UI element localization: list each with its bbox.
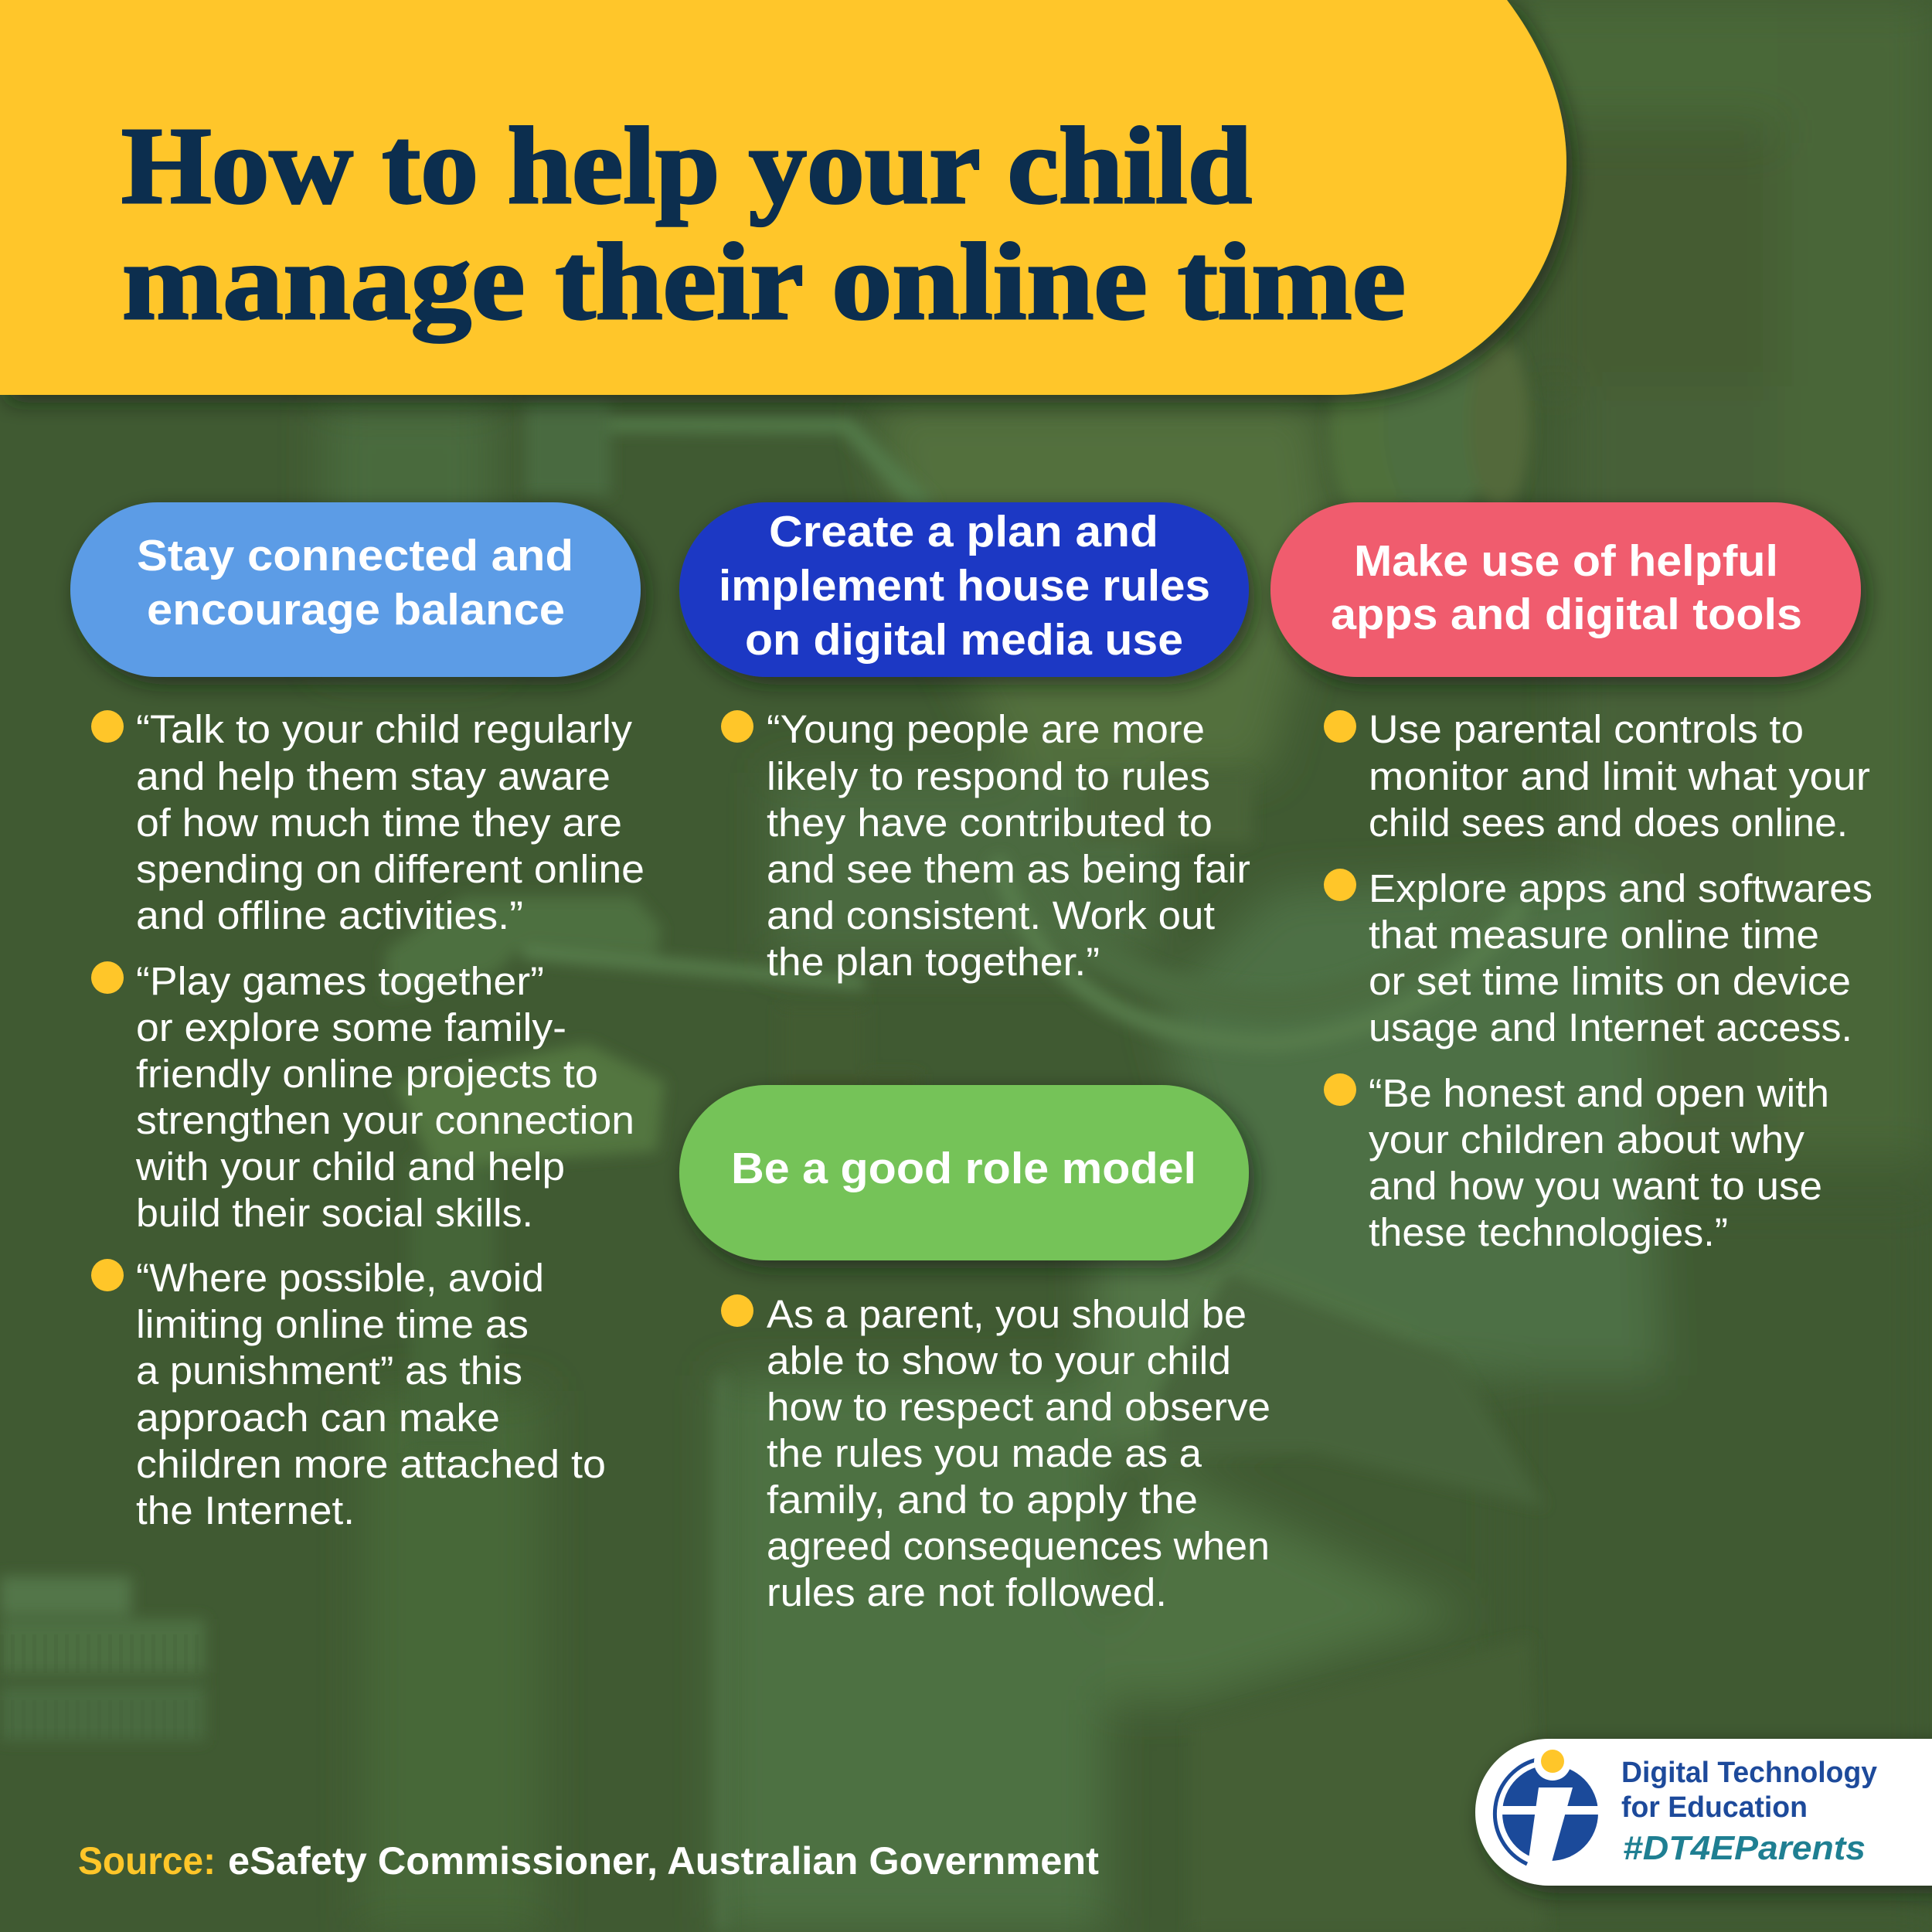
panel: role model: [679, 1085, 1270, 1614]
pill heading: role model: [679, 1085, 1249, 1260]
tip: young people: they have contributed to: [767, 801, 1213, 845]
tip: be honest: your children about why: [1369, 1117, 1805, 1162]
tip: play games together: or explore some family-: [136, 1005, 566, 1049]
source line: Source:: [78, 1839, 216, 1883]
pill heading: stay connected: [70, 502, 641, 677]
tip: as a parent: As a parent, you should be: [767, 1292, 1247, 1336]
tip: parental controls: monitor and limit what your: [1369, 754, 1870, 798]
tip: young people: the plan together.”: [767, 940, 1100, 984]
pill heading: helpful apps: Make use of helpful: [1354, 536, 1778, 586]
tip: play games together: strengthen your connection: [136, 1098, 634, 1142]
pill heading: helpful apps: apps and digital tools: [1331, 590, 1802, 639]
header banner: [0, 0, 1566, 395]
tip: as a parent: rules are not followed.: [767, 1570, 1167, 1614]
tip: as a parent: agreed consequences when: [767, 1524, 1270, 1568]
tip: parental controls: child sees and does online.: [1369, 801, 1848, 845]
tip: parental controls: [1324, 707, 1870, 845]
tip: talk to your child: and help them stay aware: [136, 754, 611, 798]
tip: talk to your child: spending on different online: [136, 847, 645, 891]
tip: as a parent: family, and to apply the: [767, 1478, 1198, 1522]
tip: as a parent: [721, 1292, 1270, 1614]
pill heading: stay connected: Stay connected and: [137, 531, 573, 580]
tip: young people: likely to respond to rules: [767, 754, 1210, 798]
tip: talk to your child: “Talk to your child regularly: [136, 707, 633, 751]
tip: explore apps: or set time limits on device: [1369, 959, 1851, 1003]
tip: explore apps: [1324, 866, 1872, 1049]
pill heading: role model: Be a good role model: [731, 1144, 1196, 1193]
title: How to help your child: [121, 104, 1252, 226]
tip: avoid limiting online time: [91, 1256, 606, 1532]
title: manage their online time: [122, 220, 1406, 342]
source line: eSafety Commissioner, Australian Government: [228, 1839, 1099, 1883]
title: [121, 104, 1406, 342]
logo text: #DT4EParents: [1623, 1829, 1866, 1867]
logo text: for Education: [1621, 1791, 1808, 1824]
logo text: [1621, 1757, 1877, 1867]
tip: be honest: [1324, 1071, 1829, 1254]
tip: explore apps: Explore apps and softwares: [1369, 866, 1872, 910]
tip: avoid limiting online time: limiting online time as: [136, 1302, 529, 1346]
tip: talk to your child: of how much time they are: [136, 801, 622, 845]
tip: avoid limiting online time: a punishment” as this: [136, 1349, 522, 1393]
panel: helpful apps: [1270, 502, 1872, 1254]
pill heading: create a plan: Create a plan and: [769, 507, 1158, 556]
panel: create a plan: [679, 502, 1250, 984]
tip: be honest: these technologies.”: [1369, 1210, 1728, 1254]
tip: talk to your child: and offline activities.”: [136, 893, 523, 937]
tip: play games together: build their social skills.: [136, 1191, 533, 1235]
tip: as a parent: the rules you made as a: [767, 1431, 1202, 1475]
tip: be honest: and how you want to use: [1369, 1164, 1822, 1208]
tip: young people: and see them as being fair: [767, 847, 1250, 891]
tip: play games together: [91, 959, 634, 1235]
pill heading: create a plan: on digital media use: [745, 615, 1183, 665]
tip: explore apps: usage and Internet access.: [1369, 1005, 1852, 1049]
tip: avoid limiting online time: children more attached to: [136, 1442, 606, 1486]
tip: be honest: “Be honest and open with: [1369, 1071, 1829, 1115]
pill heading: create a plan: implement house rules: [719, 561, 1210, 611]
tip: young people: and consistent. Work out: [767, 893, 1215, 937]
tip: play games together: “Play games together”: [136, 959, 544, 1003]
logo badge: [1475, 1739, 1932, 1886]
icon: digital technology logo: [1495, 1743, 1603, 1870]
tip: avoid limiting online time: the Internet.: [136, 1488, 355, 1532]
tip: play games together: friendly online projects to: [136, 1052, 598, 1096]
tip: as a parent: able to show to your child: [767, 1338, 1231, 1383]
tip: talk to your child: [91, 707, 645, 937]
pill heading: stay connected: encourage balance: [147, 585, 565, 634]
tip: young people: “Young people are more: [767, 707, 1205, 751]
panel: stay connected: [70, 502, 645, 1532]
tip: play games together: with your child and help: [135, 1145, 565, 1189]
pill heading: create a plan: [679, 502, 1249, 677]
tip: as a parent: how to respect and observe: [767, 1385, 1270, 1429]
tip: young people: [721, 707, 1250, 984]
tip: explore apps: that measure online time: [1369, 913, 1819, 957]
tip: avoid limiting online time: approach can make: [136, 1396, 500, 1440]
tip: avoid limiting online time: “Where possible, avoid: [136, 1256, 544, 1300]
tip: parental controls: Use parental controls to: [1369, 707, 1804, 751]
logo text: Digital Technology: [1621, 1757, 1877, 1789]
pill heading: helpful apps: [1270, 502, 1861, 677]
